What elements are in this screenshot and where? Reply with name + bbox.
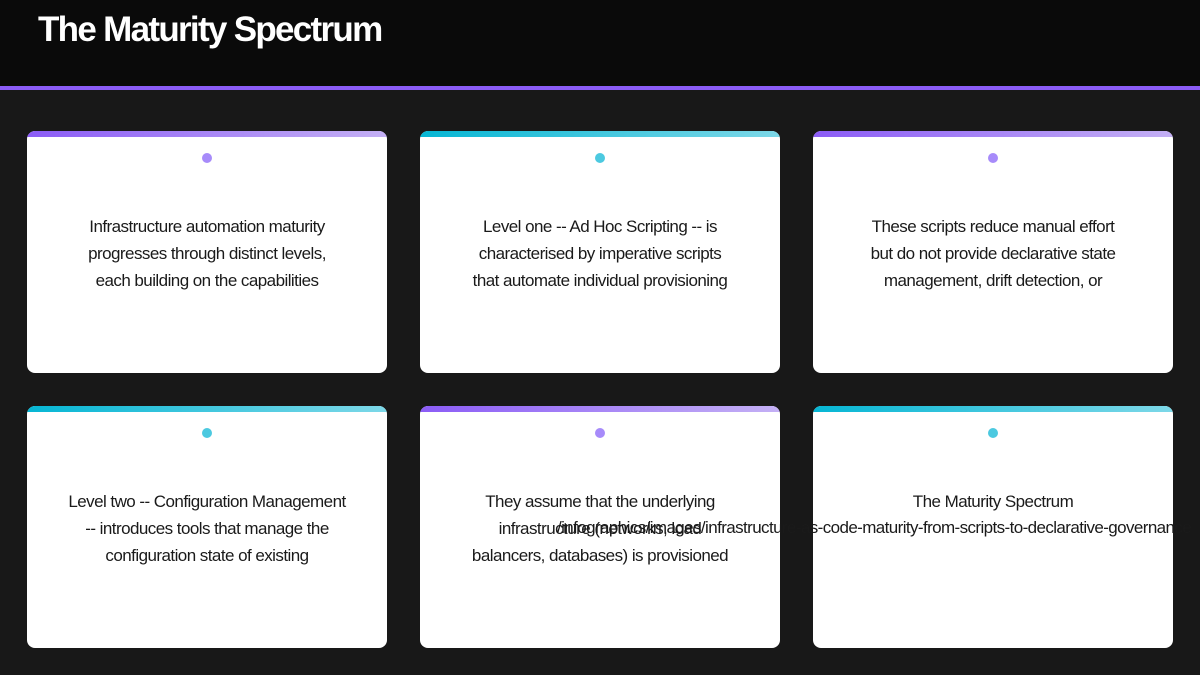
card 2 text: Level one -- Ad Hoc Scripting -- is xyxy=(483,217,717,236)
card 3 text: These scripts reduce manual effort xyxy=(872,217,1114,236)
card 1 text xyxy=(88,217,326,290)
card 4 text: -- introduces tools that manage the xyxy=(85,519,329,538)
card 3 text: but do not provide declarative state xyxy=(871,244,1115,263)
header bar xyxy=(0,0,1200,86)
title: The Maturity Spectrum xyxy=(38,10,382,49)
card 1 text: progresses through distinct levels, xyxy=(88,244,326,263)
card 2 text: that automate individual provisioning xyxy=(473,271,727,290)
card 5 text: infrastructure (networks, load xyxy=(499,519,701,538)
card 6 xyxy=(813,406,1173,648)
card 4 text xyxy=(68,492,346,565)
card 5 text: balancers, databases) is provisioned xyxy=(472,546,728,565)
card 4 text: Level two -- Configuration Management xyxy=(68,492,346,511)
card 3 text: management, drift detection, or xyxy=(884,271,1102,290)
card 1 text: each building on the capabilities xyxy=(96,271,318,290)
card 4 text: configuration state of existing xyxy=(105,546,309,565)
card 1 text: Infrastructure automation maturity xyxy=(89,217,325,236)
card 6 text: The Maturity Spectrum xyxy=(913,492,1073,511)
card 5 text: They assume that the underlying xyxy=(485,492,715,511)
overflowing url text: /infographics/images/infrastructure-as-code-maturity-from-scripts-to-declarative-governance xyxy=(557,518,1191,537)
card 2 text xyxy=(472,217,727,290)
card 2 text: characterised by imperative scripts xyxy=(479,244,721,263)
card 4 xyxy=(27,406,387,648)
card 5 text xyxy=(472,492,728,565)
card 3 text xyxy=(871,217,1116,290)
card 2 xyxy=(420,131,780,373)
card 5 xyxy=(420,406,780,648)
card 3 xyxy=(813,131,1173,373)
card 1 xyxy=(27,131,387,373)
